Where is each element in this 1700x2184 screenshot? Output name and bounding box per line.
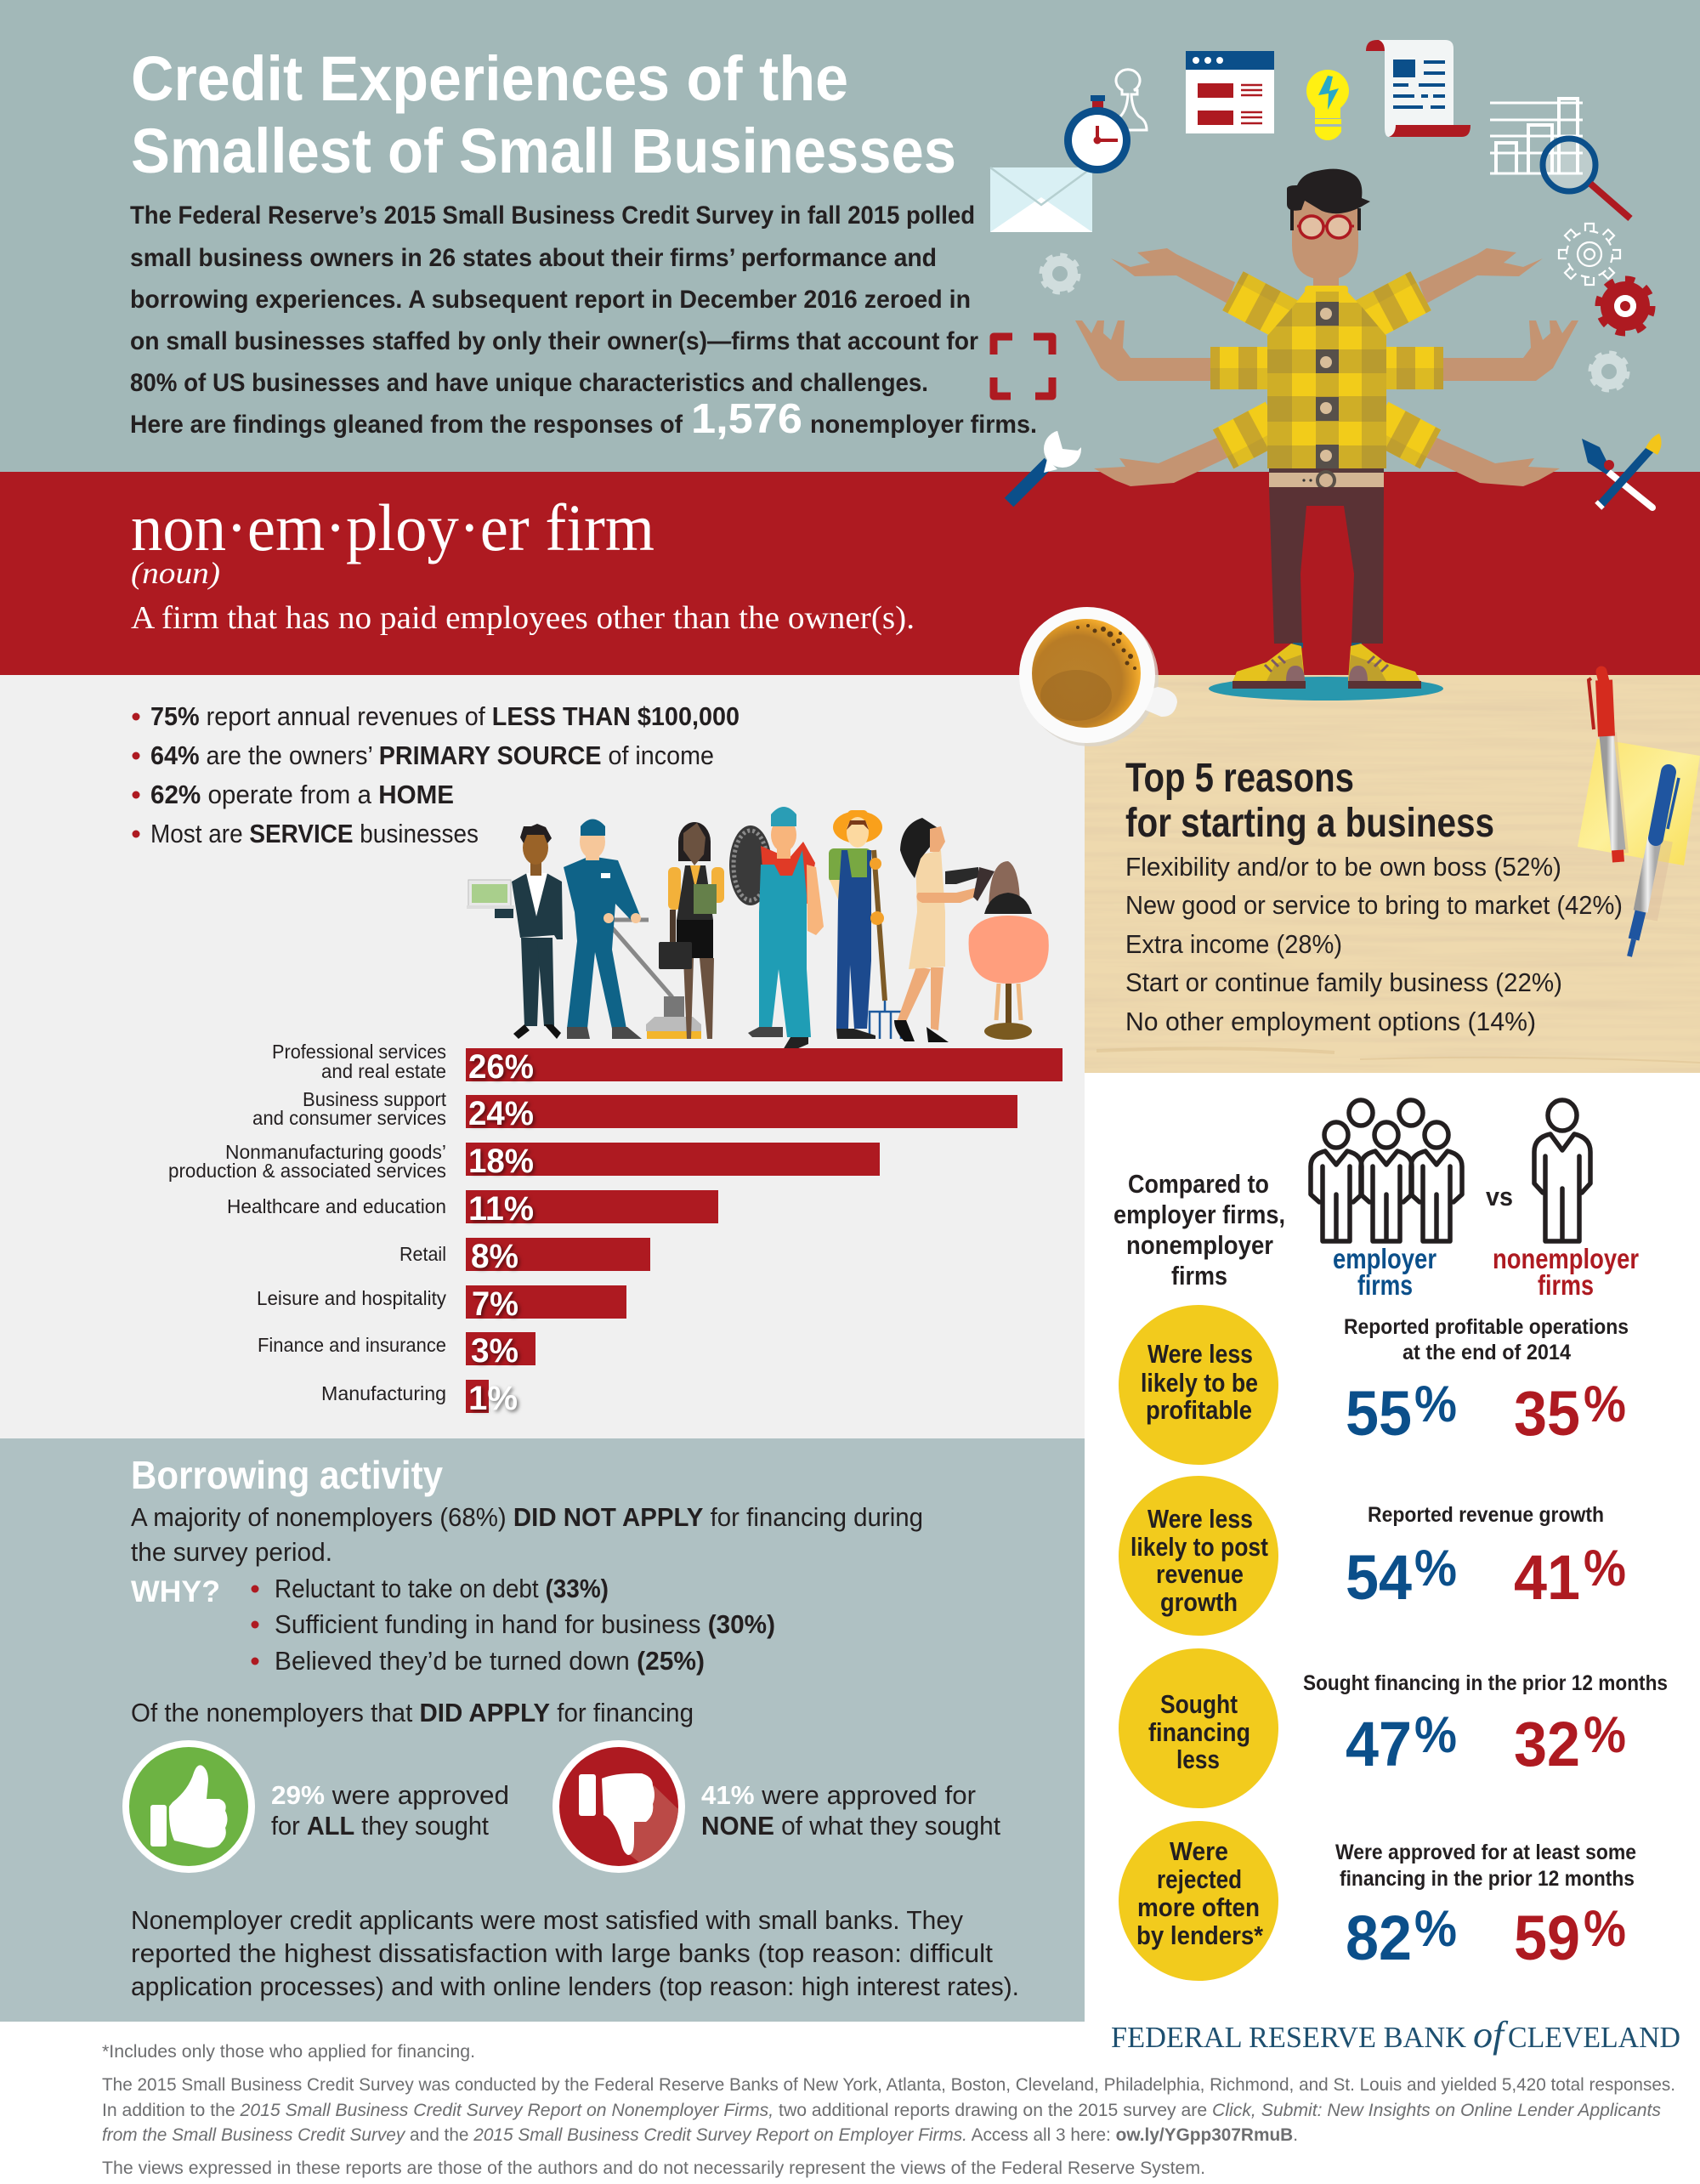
bar: professional services 26%: and real estate [321, 1060, 446, 1082]
bar: healthcare 11% [227, 1190, 718, 1228]
intro text: The Federal Reserve’s 2015 Small Business Credit Survey in fall 2015 polled [130, 201, 975, 230]
bar: finance 3%: 3% [471, 1332, 518, 1370]
list: top 5 reasons [1125, 852, 1623, 1036]
icon: thumbs up [122, 1740, 255, 1873]
stat: employer 54 percent [1346, 1540, 1457, 1613]
plaid shirt [1267, 286, 1386, 468]
characteristic bullets: Most are SERVICE businesses [150, 819, 479, 848]
icon: gray gear left [1042, 256, 1078, 292]
worker: professional [467, 824, 563, 1039]
bar: nonmanufacturing 18%: production & associated services [168, 1160, 446, 1182]
heading: top 5 reasons [1125, 756, 1494, 846]
definition text: non·em·ploy·er firm [131, 491, 654, 564]
stat: employer 54 percent: 54 [1346, 1542, 1412, 1613]
text: why: WHY? [131, 1575, 220, 1608]
intro text [130, 201, 1037, 442]
stat heading: sought financing: Sought financing in the prior 12 months [1303, 1671, 1668, 1695]
text: compared to: employer firms, [1114, 1200, 1285, 1229]
stat: employer 82 percent: % [1414, 1900, 1457, 1957]
text: did not apply: A majority of nonemployers (68%) DID NOT APPLY for financing during [131, 1502, 923, 1532]
stat: employer 47 percent: 47 [1346, 1709, 1412, 1779]
footer: survey description: The 2015 Small Business Credit Survey was conducted by the Federal Reserve Banks of New York, Atlanta, Boston, Cleveland, Philadelphia, Richmond, and St. Louis and yielded 5,420 total responses. [102, 2075, 1675, 2095]
badge: less likely to be profitable: likely to be [1141, 1368, 1258, 1398]
list: top 5 reasons: Start or continue family business (22%) [1125, 967, 1562, 997]
stat: employer 54 percent: % [1414, 1540, 1457, 1597]
text: 29 percent approved [271, 1780, 509, 1841]
text: vs: vs [1486, 1182, 1513, 1211]
sleeves [1210, 271, 1443, 468]
badge: rejected more often: by lenders* [1136, 1920, 1264, 1950]
text: 41 percent approved: 41% were approved for [701, 1780, 976, 1810]
icon: red gear [1599, 280, 1652, 332]
bar chart: service types [168, 1041, 1062, 1417]
stat: nonemployer 59 percent: % [1584, 1900, 1626, 1957]
heading: top 5 reasons: Top 5 reasons [1125, 756, 1354, 801]
characteristic bullets: 62% operate from a HOME [150, 780, 454, 809]
badge: sought financing less: less [1176, 1744, 1220, 1774]
icon: document scroll [1366, 40, 1470, 137]
text: satisfaction paragraph: application processes) and with online lenders (top reason: high interest rates). [131, 1971, 1019, 2001]
panel: firm characteristics background [0, 675, 1085, 1438]
heading: top 5 reasons: for starting a business [1125, 801, 1494, 846]
bar: professional services 26%: Professional services [272, 1041, 446, 1063]
icon: stopwatch [1064, 95, 1130, 173]
badge: less likely to post growth [1119, 1476, 1278, 1636]
text: 41 percent approved: NONE of what they sought [701, 1811, 1000, 1841]
bar: finance 3% [258, 1332, 536, 1370]
intro text: Here are findings gleaned from the responses of [130, 411, 683, 439]
icon: red pen [1589, 672, 1622, 862]
stat: nonemployer 35 percent: 35 [1514, 1378, 1580, 1449]
worker: farmer [829, 810, 901, 1039]
stat: employer 55 percent: % [1414, 1376, 1457, 1432]
label: nonemployer firms: nonemployer [1493, 1243, 1639, 1274]
footnote: *Includes only those who applied for financing. [102, 2042, 475, 2062]
bar: professional services 26% [272, 1041, 1062, 1086]
title: Smallest of Small Businesses [131, 116, 956, 186]
text: did not apply [131, 1502, 923, 1567]
bar: nonmanufacturing 18% [168, 1141, 880, 1182]
panel: wood desk [1085, 675, 1700, 1073]
text: compared to [1114, 1169, 1285, 1291]
text: why [131, 1574, 775, 1676]
badge: rejected more often: more often [1137, 1892, 1260, 1922]
logo: Federal Reserve Bank of Cleveland: of [1473, 2014, 1509, 2056]
icon: bar chart with magnifier [1490, 99, 1630, 218]
text: 29 percent approved: 29% were approved [271, 1780, 509, 1810]
icon: blue pen [1629, 772, 1679, 956]
badge: less likely to post growth: Were less [1148, 1504, 1253, 1534]
icon: chess pawn [1114, 70, 1147, 130]
stat: employer 55 percent [1346, 1376, 1457, 1449]
bar: professional services 26%: 26% [468, 1048, 534, 1086]
footer: disclaimer: The views expressed in these reports are those of the authors and do not necessarily represent the views of the Federal Reserve System. [102, 2158, 1205, 2178]
icon: employer group [1311, 1100, 1462, 1241]
icon: sticky note [1578, 739, 1700, 865]
worker: mechanic [729, 807, 824, 1052]
text: compared to: Compared to [1128, 1169, 1269, 1199]
heading: borrowing activity: Borrowing activity [131, 1453, 443, 1497]
stat: nonemployer 41 percent: % [1584, 1540, 1626, 1597]
text: did apply: Of the nonemployers that DID APPLY for financing [131, 1698, 694, 1727]
stat: nonemployer 35 percent [1514, 1376, 1626, 1449]
stat: nonemployer 41 percent [1514, 1540, 1626, 1613]
list: top 5 reasons: Extra income (28%) [1125, 929, 1342, 959]
badge: sought financing less [1119, 1648, 1278, 1808]
characteristic bullets: 64% are the owners’ PRIMARY SOURCE of income [150, 740, 714, 770]
worker: hairdresser [894, 818, 994, 1042]
badge: less likely to be profitable [1119, 1305, 1278, 1465]
title: Credit Experiences of the [131, 43, 848, 114]
icon: single nonemployer [1534, 1100, 1590, 1241]
stat heading: profitable operations: Reported profitable operations [1344, 1315, 1629, 1339]
stat heading: approved: Were approved for at least some [1335, 1841, 1636, 1864]
panel: borrowing activity background [0, 1438, 1085, 2022]
definition text [131, 491, 915, 636]
row: sought financing [1119, 1648, 1668, 1808]
text: did not apply: the survey period. [131, 1537, 332, 1567]
footer: survey description [102, 2075, 1675, 2145]
badge: less likely to post growth: growth [1160, 1587, 1238, 1617]
stat: nonemployer 59 percent [1514, 1900, 1626, 1973]
intro text: 80% of US businesses and have unique characteristics and challenges. [130, 369, 928, 397]
intro text: nonemployer firms. [810, 411, 1037, 439]
worker: salon client [969, 861, 1049, 1040]
floor mat [1209, 677, 1443, 701]
panel: definition band [0, 472, 1700, 675]
text: why: Believed they’d be turned down (25%) [275, 1646, 705, 1676]
footer: survey description: In addition to the 2015 Small Business Credit Survey Report on Nonemployer Firms, two additional reports drawing on the 2015 survey are Click, Submit: New Insights on Online Lender Applicants [102, 2101, 1662, 2120]
badge: rejected more often: rejected [1157, 1864, 1242, 1894]
stat heading: profitable operations: at the end of 2014 [1402, 1341, 1571, 1364]
bar: nonmanufacturing 18%: Nonmanufacturing goods’ [225, 1141, 446, 1163]
badge: less likely to be profitable: Were less [1148, 1339, 1253, 1369]
list: top 5 reasons: New good or service to bring to market (42%) [1125, 890, 1623, 920]
text: why: Sufficient funding in hand for business (30%) [275, 1609, 775, 1639]
stat: nonemployer 32 percent: % [1584, 1706, 1626, 1763]
badge: less likely to post growth: likely to post [1130, 1532, 1268, 1562]
stat: employer 82 percent: 82 [1346, 1903, 1412, 1973]
panel: comparison background [1085, 1073, 1700, 2022]
footer: survey description: from the Small Business Credit Survey and the 2015 Small Business Credit Survey Report on Employer Firms. Access all 3 here: ow.ly/YGpp307RmuB. [102, 2125, 1298, 2145]
stat heading: approved: financing in the prior 12 months [1340, 1867, 1635, 1891]
text: 29 percent approved: for ALL they sought [271, 1811, 489, 1841]
text: compared to: firms [1171, 1261, 1227, 1291]
worker: office woman [659, 822, 724, 1039]
bar: healthcare 11%: 11% [468, 1190, 534, 1228]
intro text: borrowing experiences. A subsequent report in December 2016 zeroed in [130, 286, 971, 314]
badge: less likely to post growth: revenue [1156, 1559, 1244, 1589]
text: why: Reluctant to take on debt (33%) [275, 1574, 609, 1603]
stat: employer 47 percent [1346, 1706, 1457, 1779]
neck and head [1287, 169, 1370, 295]
icon: envelope [990, 167, 1092, 232]
bar: healthcare 11%: Healthcare and education [227, 1195, 446, 1217]
text: satisfaction paragraph: reported the highest dissatisfaction with large banks (top reason: difficult [131, 1938, 993, 1968]
boots [1232, 643, 1421, 689]
icon: pen and paintbrush [1582, 434, 1662, 508]
stat: employer 55 percent: 55 [1346, 1378, 1412, 1449]
badge: sought financing less: Sought [1160, 1689, 1238, 1719]
bar: business support 24%: Business support [303, 1088, 446, 1110]
arms right side [1419, 248, 1578, 486]
man figure [1075, 169, 1578, 701]
label: nonemployer firms: firms [1538, 1269, 1594, 1301]
stat: nonemployer 59 percent: 59 [1514, 1903, 1580, 1973]
stat heading: profitable operations [1344, 1315, 1629, 1364]
bar: manufacturing 1% [321, 1380, 518, 1417]
icon: outline gear [1559, 224, 1620, 285]
bar: business support 24%: 24% [468, 1095, 534, 1132]
bar: finance 3%: Finance and insurance [258, 1334, 446, 1356]
logo: Federal Reserve Bank of Cleveland [1111, 2014, 1680, 2056]
stat: nonemployer 32 percent: 32 [1514, 1709, 1580, 1779]
logo: Federal Reserve Bank of Cleveland: FEDERAL RESERVE BANK [1111, 2021, 1466, 2054]
icon: browser window [1186, 51, 1274, 133]
stat: nonemployer 41 percent: 41 [1514, 1542, 1580, 1613]
badge: rejected more often [1119, 1821, 1278, 1981]
stat heading: revenue growth: Reported revenue growth [1368, 1503, 1604, 1527]
badge: sought financing less: financing [1148, 1717, 1250, 1747]
bar: business support 24%: and consumer services [252, 1107, 446, 1129]
definition text: (noun) [131, 556, 220, 590]
icon: wrench [1009, 427, 1086, 502]
characteristic bullets: 75% report annual revenues of LESS THAN $100,000 [150, 701, 740, 731]
intro text: small business owners in 26 states about their firms’ performance and [130, 244, 937, 272]
intro text: on small businesses staffed by only their owner(s)—firms that account for [130, 327, 978, 355]
title [131, 43, 956, 186]
label: employer firms [1333, 1243, 1436, 1301]
icon: gray gear right [1591, 354, 1627, 389]
row: profitable [1119, 1305, 1629, 1465]
worker: janitor [564, 820, 701, 1039]
text: satisfaction paragraph: Nonemployer credit applicants were most satisfied with small banks. They [131, 1905, 963, 1935]
row: revenue growth [1119, 1476, 1626, 1636]
text: satisfaction paragraph [131, 1905, 1019, 2001]
logo: Federal Reserve Bank of Cleveland: CLEVELAND [1508, 2021, 1680, 2054]
label: employer firms: employer [1333, 1243, 1436, 1274]
bar: leisure 7% [257, 1285, 626, 1323]
icon: focus brackets [994, 337, 1052, 396]
icon: light bulb [1306, 70, 1349, 140]
bar: retail 8% [400, 1238, 650, 1275]
belt [1269, 468, 1384, 489]
definition text: A firm that has no paid employees other than the owner(s). [131, 600, 915, 636]
stat: employer 82 percent [1346, 1900, 1457, 1973]
label: nonemployer firms [1493, 1243, 1639, 1301]
bar: nonmanufacturing 18%: 18% [468, 1143, 534, 1180]
bar: manufacturing 1%: Manufacturing [321, 1382, 446, 1404]
badge: rejected more often: Were [1170, 1836, 1228, 1866]
bar: manufacturing 1%: 1% [468, 1380, 518, 1417]
arms left side [1075, 248, 1235, 486]
trousers [1269, 487, 1384, 644]
intro text: 1,576 [691, 396, 802, 442]
bar: business support 24% [252, 1088, 1017, 1132]
list: top 5 reasons: Flexibility and/or to be own boss (52%) [1125, 852, 1561, 882]
stat: employer 47 percent: % [1414, 1706, 1457, 1763]
list: top 5 reasons: No other employment options (14%) [1125, 1007, 1536, 1036]
text: compared to: nonemployer [1126, 1230, 1273, 1260]
icon: thumbs down [552, 1740, 688, 1873]
badge: less likely to be profitable: profitable [1146, 1395, 1252, 1425]
panel: header background [0, 0, 1700, 472]
label: employer firms: firms [1357, 1269, 1413, 1301]
text: 41 percent approved [701, 1780, 1000, 1841]
characteristic bullets [133, 701, 740, 848]
bar: leisure 7%: 7% [472, 1285, 518, 1323]
icon: coffee cup [1019, 607, 1177, 746]
bar: leisure 7%: Leisure and hospitality [257, 1287, 446, 1309]
stat: nonemployer 35 percent: % [1584, 1376, 1626, 1432]
stat: nonemployer 32 percent [1514, 1706, 1626, 1779]
bar: retail 8%: 8% [471, 1238, 518, 1275]
stat heading: approved [1335, 1841, 1636, 1891]
row: rejected [1119, 1821, 1636, 1981]
bar: retail 8%: Retail [400, 1243, 446, 1265]
illustration: workers [467, 807, 1049, 1052]
